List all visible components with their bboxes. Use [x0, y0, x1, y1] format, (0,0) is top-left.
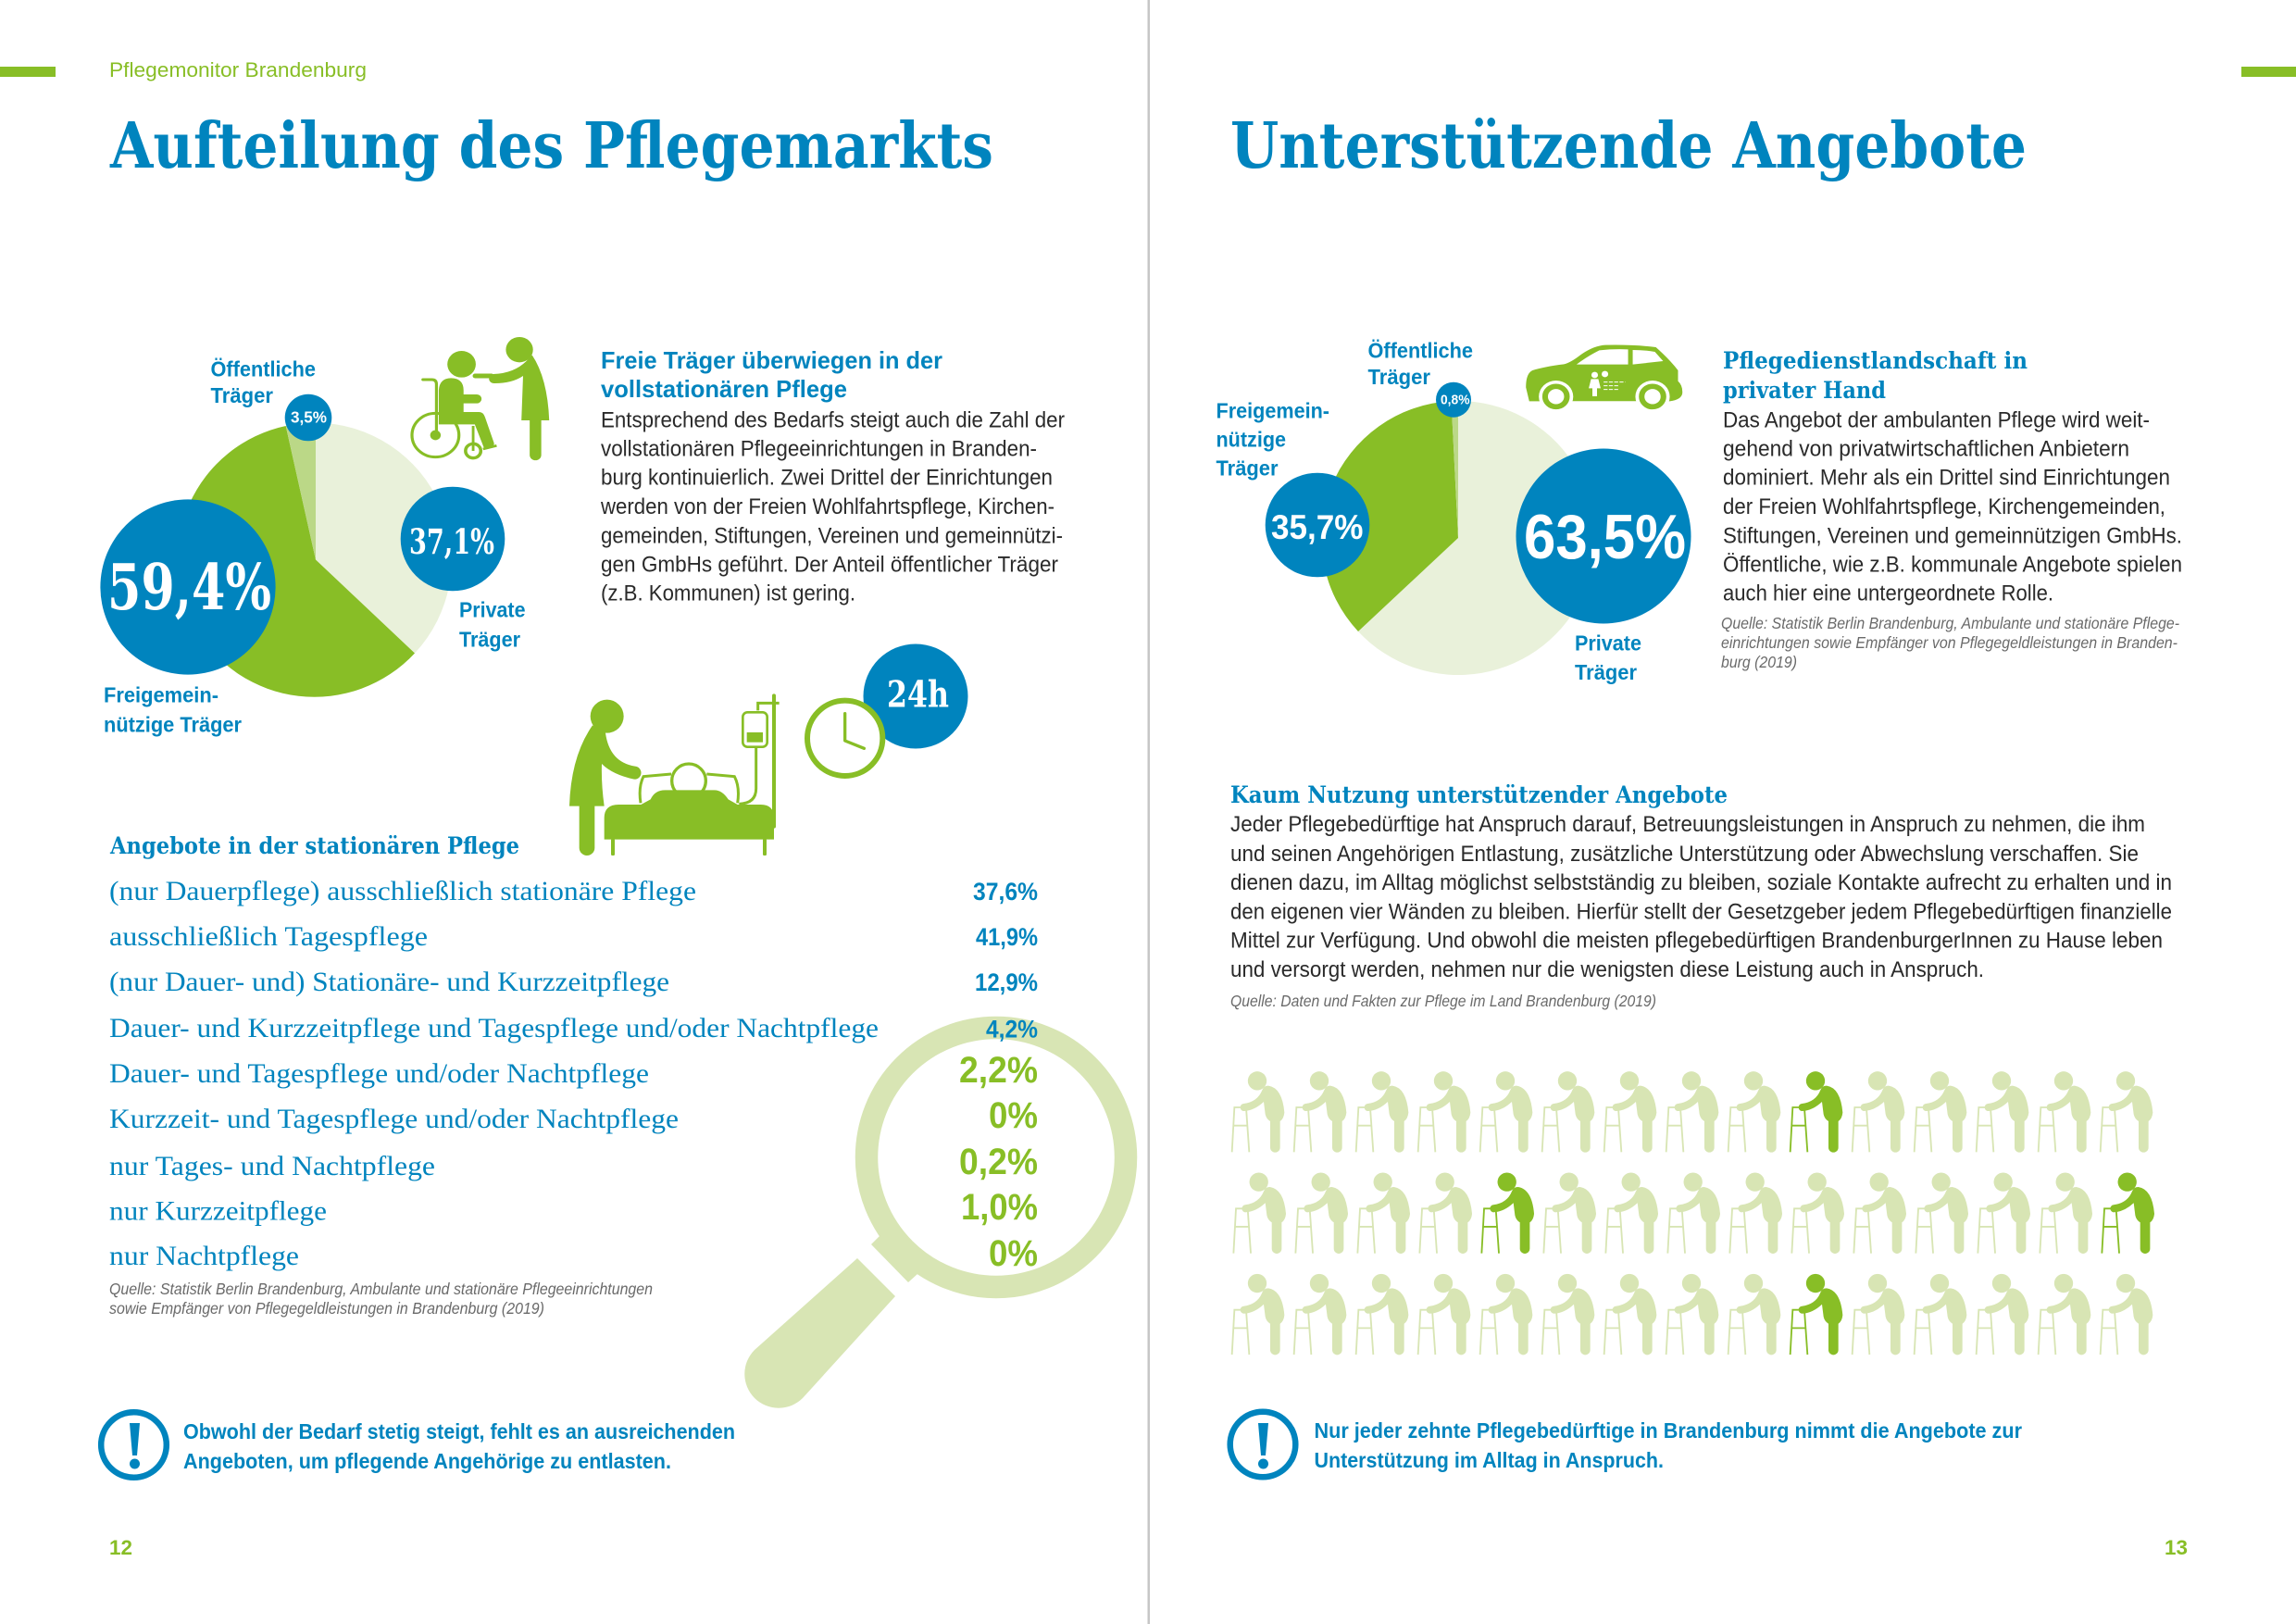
icon: magnifying glass	[744, 1028, 1126, 1408]
label private	[1575, 631, 1641, 684]
label non-profit: Träger	[1217, 456, 1278, 480]
bubble 3,5%	[285, 394, 331, 441]
row 3	[1232, 1274, 2152, 1355]
green tab right	[2241, 67, 2296, 77]
row values: 4,2%	[986, 1015, 1038, 1043]
callout text: Nur jeder zehnte Pflegebedürftige in Brandenburg nimmt die Angebote zur	[1315, 1418, 2022, 1443]
row labels: ausschließlich Tagespflege	[109, 922, 428, 952]
label public: Träger	[211, 383, 273, 407]
label private: Private	[1575, 631, 1641, 656]
bubble 63,5%: 63,5%	[1524, 502, 1686, 572]
body text: dominiert. Mehr als ein Drittel sind Einrichtungen	[1723, 465, 2170, 491]
body text: Öffentliche, wie z.B. kommunale Angebote spielen	[1723, 553, 2182, 578]
body text: und versorgt werden, nehmen nur die wenigsten diese Leistung auch in Anspruch.	[1230, 957, 1984, 982]
pie slice: private 63,5%	[1358, 401, 1595, 675]
label private: Träger	[459, 628, 520, 652]
page number 13: 13	[2165, 1536, 2188, 1559]
body text: gehend von privatwirtschaftlichen Anbietern	[1723, 437, 2129, 462]
panel: pie chart stationary care	[100, 357, 526, 737]
source note: sowie Empfänger von Pflegegeldleistungen in Brandenburg (2019)	[109, 1299, 544, 1318]
label public: Öffentliche	[211, 357, 316, 381]
label non-profit	[104, 683, 242, 737]
pie slice: non-profit 35,7%	[1321, 401, 1458, 631]
source note	[1721, 614, 2179, 671]
icon: clock	[807, 701, 882, 776]
row values	[959, 878, 1038, 1274]
body text: (z.B. Kommunen) ist gering.	[601, 581, 855, 606]
label public: Öffentliche	[1368, 339, 1473, 363]
heading: Kaum Nutzung unterstützender Angebote	[1230, 781, 1728, 808]
icon: exclamation	[1230, 1412, 1295, 1477]
bubble 37,1%: 37,1%	[409, 521, 494, 562]
body text	[1723, 408, 2182, 606]
pie slice: non-profit 59,4%	[178, 426, 415, 697]
body text: gen GmbHs geführt. Der Anteil öffentlicher Träger	[601, 553, 1058, 578]
bubble 0,8%: 0,8%	[1441, 394, 1470, 408]
body text	[1230, 812, 2172, 982]
heading: Angebote in der stationären Pflege	[109, 832, 519, 859]
green tab left	[0, 67, 56, 77]
row labels: Kurzzeit- und Tagespflege und/oder Nachtpflege	[109, 1105, 679, 1134]
body text: und seinen Angehörigen Entlastung, zusätzliche Unterstützung oder Abwechslung verschaffen. Sie	[1230, 842, 2139, 867]
callout text: Unterstützung im Alltag in Anspruch.	[1315, 1448, 1664, 1472]
icon: exclamation	[101, 1412, 167, 1478]
body text: Stiftungen, Vereinen und gemeinnützigen GmbHs.	[1723, 524, 2182, 549]
callout text	[1315, 1418, 2022, 1472]
row 2	[1233, 1172, 2154, 1254]
body text: Mittel zur Verfügung. Und obwohl die meisten pflegebedürftigen BrandenburgerInnen zu Hause leben	[1230, 928, 2163, 954]
panel: pie chart ambulatory care	[1217, 339, 1691, 684]
label public	[211, 357, 316, 407]
body text	[600, 408, 1065, 606]
bubble 35,7%	[1266, 473, 1369, 577]
source note: Quelle: Daten und Fakten zur Pflege im Land Brandenburg (2019)	[1230, 992, 1656, 1010]
label public	[1368, 339, 1473, 389]
row values: 0%	[989, 1233, 1038, 1274]
body text: auch hier eine untergeordnete Rolle.	[1723, 581, 2053, 606]
icon: wheelchair and caregiver	[412, 337, 549, 460]
source note: burg (2019)	[1721, 653, 1797, 671]
heading	[1723, 347, 2028, 404]
callout left	[101, 1412, 735, 1478]
callout text: Angeboten, um pflegende Angehörige zu entlasten.	[183, 1449, 671, 1473]
icon: care service car	[1526, 345, 1682, 413]
row labels: nur Tages- und Nachtpflege	[109, 1152, 435, 1181]
callout text: Obwohl der Bedarf stetig steigt, fehlt es an ausreichenden	[183, 1419, 735, 1443]
running header: Pflegemonitor Brandenburg	[109, 58, 367, 81]
row labels: Dauer- und Kurzzeitpflege und Tagespflege und/oder Nachtpflege	[109, 1014, 879, 1043]
row labels: (nur Dauerpflege) ausschließlich stationäre Pflege	[109, 877, 696, 906]
body text: den eigenen vier Wänden zu bleiben. Hierfür stellt der Gesetzgeber jedem Pflegebedürftigen finanzielle	[1230, 899, 2172, 924]
body text: vollstationären Pflegeeinrichtungen in Branden-	[601, 437, 1037, 462]
source note	[109, 1280, 653, 1318]
pie slice: private 37,1%	[316, 422, 452, 654]
bubble 0,8%	[1436, 382, 1471, 418]
row values: 1,0%	[961, 1187, 1038, 1228]
body text: Jeder Pflegebedürftige hat Anspruch darauf, Betreuungsleistungen in Anspruch zu nehmen, die ihm	[1230, 812, 2145, 837]
label non-profit: nützige Träger	[104, 713, 242, 737]
row values: 2,2%	[959, 1050, 1038, 1091]
callout right	[1230, 1412, 2022, 1477]
row labels: nur Nachtpflege	[109, 1242, 299, 1271]
icon: nurse at hospital bed	[569, 693, 780, 856]
label non-profit: Freigemein-	[1217, 399, 1329, 423]
row labels: Dauer- und Tagespflege und/oder Nachtpflege	[109, 1059, 649, 1089]
label private: Private	[459, 598, 526, 622]
panel: text supporting offers	[1230, 781, 2172, 1010]
panel: care offers list	[109, 832, 1038, 1318]
bubble 59,4%	[100, 499, 276, 675]
pictogram grid: seniors with walkers, one in ten highlighted	[1232, 1071, 2154, 1355]
panel: text private providers	[1721, 347, 2182, 671]
body text: Das Angebot der ambulanten Pflege wird weit-	[1723, 408, 2150, 433]
body text: dienen dazu, im Alltag möglichst selbstständig zu bleiben, soziale Kontakte aufrecht zu erhalten und in	[1230, 870, 2172, 895]
label private: Träger	[1575, 660, 1637, 684]
heading: Pflegedienstlandschaft in	[1723, 347, 2028, 374]
row labels	[109, 877, 879, 1271]
source note: einrichtungen sowie Empfänger von Pflegegeldleistungen in Branden-	[1721, 633, 2177, 652]
heading: vollstationären Pflege	[601, 375, 847, 403]
row values: 12,9%	[975, 968, 1038, 996]
label non-profit: Freigemein-	[104, 683, 218, 707]
label non-profit: nützige	[1217, 428, 1286, 452]
source note: Quelle: Statistik Berlin Brandenburg, Ambulante und stationäre Pflegeeinrichtungen	[109, 1280, 653, 1298]
body text: gemeinden, Stiftungen, Vereinen und gemeinnützi-	[601, 524, 1063, 549]
heading	[601, 346, 942, 403]
bubble 37,1%	[401, 487, 505, 591]
row values: 0%	[989, 1095, 1038, 1136]
row labels: nur Kurzzeitpflege	[109, 1196, 327, 1226]
page divider	[1148, 0, 1150, 1624]
title left: Aufteilung des Pflegemarkts	[109, 109, 993, 183]
bubble 24h	[863, 644, 968, 748]
label non-profit	[1217, 399, 1329, 480]
pie slice: public 0,8%	[1452, 401, 1458, 538]
bubble 63,5%	[1516, 448, 1691, 624]
body text: der Freien Wohlfahrtspflege, Kirchengemeinden,	[1723, 494, 2165, 519]
bubble 24h: 24h	[887, 674, 949, 717]
callout text	[183, 1419, 735, 1473]
page number 12: 12	[109, 1536, 132, 1559]
heading: Freie Träger überwiegen in der	[601, 346, 942, 374]
row values: 0,2%	[959, 1142, 1038, 1182]
body text: Entsprechend des Bedarfs steigt auch die Zahl der	[601, 408, 1065, 433]
row 1	[1232, 1071, 2152, 1153]
label public: Träger	[1368, 365, 1430, 389]
heading: privater Hand	[1723, 377, 1886, 404]
row labels: (nur Dauer- und) Stationäre- und Kurzzeitpflege	[109, 968, 669, 997]
panel: text free providers	[600, 346, 1065, 606]
label private	[459, 598, 526, 652]
pie slice: public 3,5%	[286, 422, 316, 559]
title right: Unterstützende Angebote	[1230, 109, 2027, 183]
bubble 59,4%: 59,4%	[107, 551, 271, 625]
bubble 35,7%: 35,7%	[1271, 508, 1363, 546]
body text: werden von der Freien Wohlfahrtspflege, Kirchen-	[600, 494, 1054, 519]
body text: burg kontinuierlich. Zwei Drittel der Einrichtungen	[601, 465, 1053, 491]
row values: 37,6%	[973, 878, 1038, 906]
bubble 3,5%: 3,5%	[291, 408, 327, 427]
row values: 41,9%	[976, 923, 1038, 951]
source note: Quelle: Statistik Berlin Brandenburg, Ambulante und stationäre Pflege-	[1721, 614, 2179, 632]
